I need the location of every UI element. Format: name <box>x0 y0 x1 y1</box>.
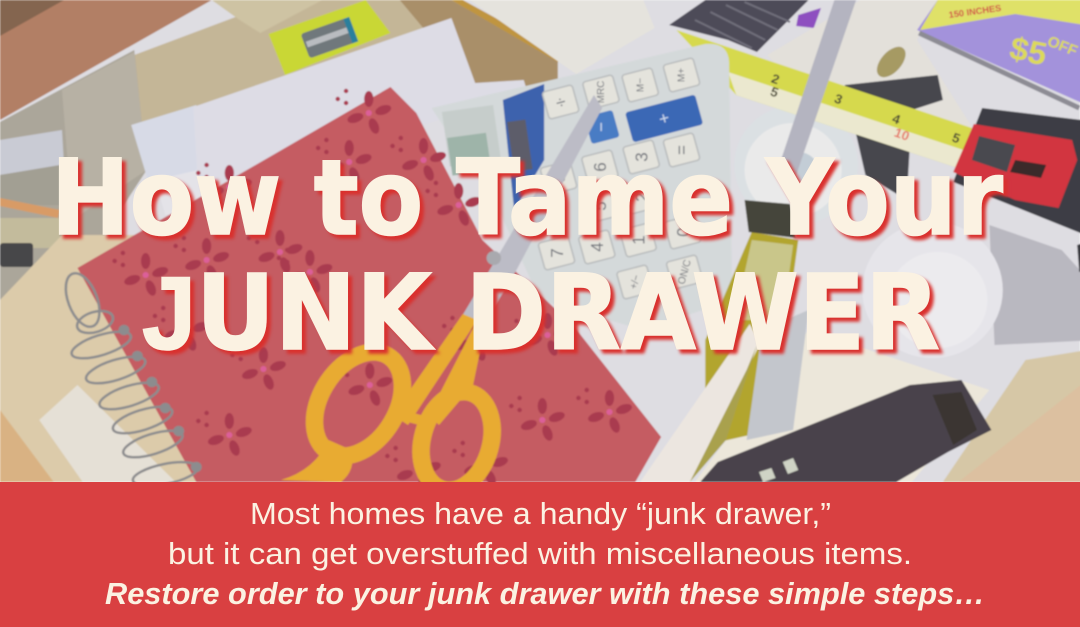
battery on green card <box>269 0 390 75</box>
calculator <box>432 44 732 330</box>
screwdriver <box>705 0 856 445</box>
coupon: $5 off: OFF <box>1045 33 1080 60</box>
measuring tape: 3 <box>832 91 845 107</box>
coupon: $5 off <box>917 0 1080 110</box>
title line 2: JUNK DRAWER <box>142 252 940 374</box>
coupon: $5 off: 150 INCHES <box>948 3 1002 20</box>
intro line 1: Most homes have a handy “junk drawer,” <box>250 496 831 531</box>
cardboard drawer liner <box>134 0 486 190</box>
calculator keys: 6 <box>590 162 610 172</box>
measuring tape: 10 <box>892 125 912 144</box>
photo: overstuffed junk drawer <box>0 0 1080 498</box>
left back of drawer <box>0 0 563 482</box>
small beige box <box>212 0 322 33</box>
calculator keys: 5 <box>590 201 610 211</box>
red intro band <box>0 482 1080 627</box>
calculator keys: 3 <box>631 152 652 162</box>
calculator keys: ÷ <box>553 91 568 113</box>
calculator keys: + <box>656 107 672 129</box>
calculator keys: M+ <box>677 68 688 82</box>
cream paper under stapler <box>695 330 989 482</box>
measuring tape: 4 <box>890 111 903 127</box>
black stapler <box>700 380 991 482</box>
torn white card with brass knob <box>767 0 974 130</box>
white card under spiral <box>39 385 176 482</box>
measuring tape: 5 <box>950 130 962 146</box>
calculator keys: 7 <box>546 248 567 258</box>
white papers <box>131 18 527 215</box>
tape roll behind screwdriver <box>734 105 858 225</box>
wooden drawer floor <box>0 235 217 482</box>
dark tape measure base <box>845 75 943 200</box>
calculator keys: 9 <box>549 173 569 183</box>
large tape roll, lower right <box>862 222 1080 358</box>
calculator keys <box>538 58 703 299</box>
calculator keys: − <box>591 122 611 132</box>
intro line 3, call to action: Restore order to your junk drawer with these simple steps… <box>105 576 985 611</box>
ribbed black object <box>669 0 821 52</box>
title <box>51 137 1003 374</box>
intro line 2: but it can get overstuffed with miscellaneous items. <box>168 536 912 571</box>
scissors <box>281 95 602 498</box>
calculator keys: M− <box>635 78 646 92</box>
measuring tape: 5 <box>768 84 781 100</box>
calculator keys: = <box>671 145 692 155</box>
calculator keys: 4 <box>587 242 607 252</box>
calculator keys: 1 <box>628 235 648 245</box>
calculator keys: MRC <box>596 81 607 103</box>
red notebook <box>77 87 661 492</box>
notebook spiral binding <box>59 269 200 490</box>
red tape measure housing <box>953 108 1080 240</box>
measuring tape <box>676 30 972 168</box>
white blade <box>640 324 760 482</box>
calculator keys: 0 <box>673 227 693 237</box>
calculator keys: ON/C <box>676 259 694 286</box>
calculator keys: 2 <box>631 192 652 202</box>
wood strip and corner, bottom right <box>943 345 1080 482</box>
coupon: $5 off: $5 <box>1006 30 1050 72</box>
front left items <box>39 87 661 498</box>
plastic bag <box>0 50 147 300</box>
brown drawer back <box>400 0 558 95</box>
calculator keys: +/− <box>628 274 643 291</box>
title line 1: How to Tame Your <box>51 137 1003 259</box>
right back of drawer <box>432 0 1080 482</box>
white box top centre <box>470 0 655 74</box>
front right items <box>640 324 991 482</box>
measuring tape: 2 <box>769 71 782 87</box>
wooden drawer side, top left <box>0 0 212 120</box>
